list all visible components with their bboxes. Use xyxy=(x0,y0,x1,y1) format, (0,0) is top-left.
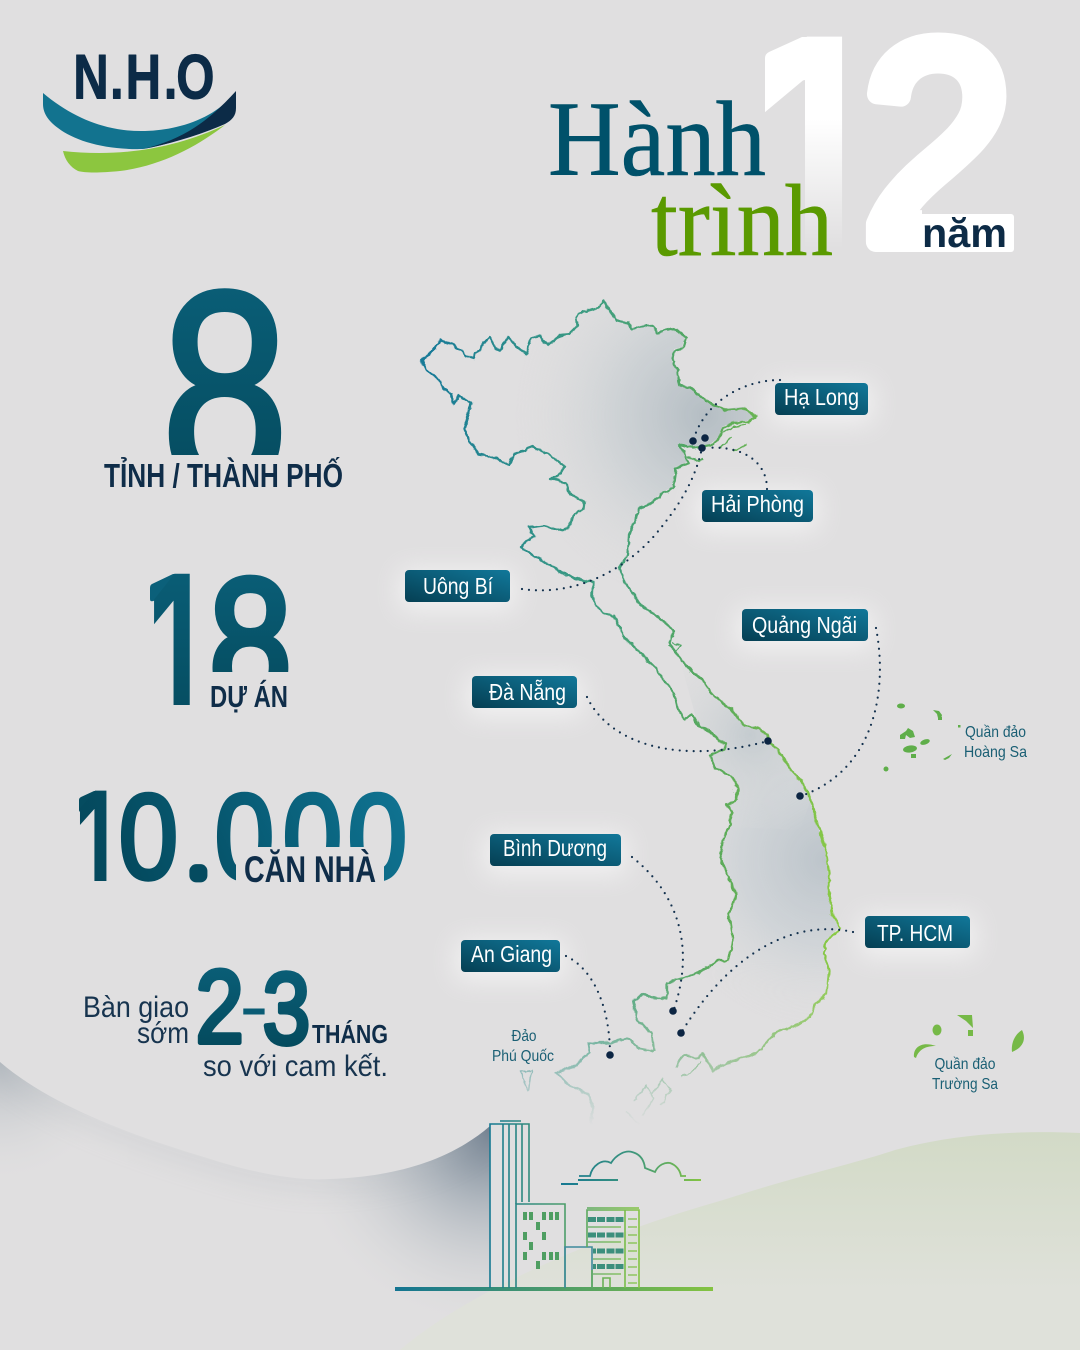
city skyline illustration xyxy=(395,1121,713,1291)
number 1 of 18 xyxy=(150,574,190,705)
islands: Hoang Sa xyxy=(884,704,960,772)
background wave: bottom left shadow xyxy=(0,1062,490,1278)
text THANG: THÁNG xyxy=(312,1019,388,1049)
label glows xyxy=(400,383,975,980)
number 2-3: - xyxy=(240,979,268,1035)
map outline xyxy=(421,301,839,1125)
islands label: Truong Sa: Trường Sa xyxy=(932,1076,998,1093)
stat: handover 2-3 months early xyxy=(83,949,388,1083)
label: Quang Ngai: Quảng Ngãi xyxy=(752,612,857,638)
islands label: Truong Sa: Quần đảo xyxy=(934,1056,996,1073)
word trinh: trình xyxy=(651,164,833,278)
digit 0: 0 xyxy=(119,771,178,905)
three clipped zeros: 0 xyxy=(283,771,342,905)
text som: sớm xyxy=(137,1017,189,1050)
three clipped zeros: 0 xyxy=(348,771,407,905)
caption: DỰ ÁN xyxy=(210,679,288,714)
caption: TỈNH / THÀNH PHỐ xyxy=(104,456,343,494)
tower xyxy=(490,1121,529,1288)
caption: CĂN NHÀ xyxy=(244,849,376,890)
background hill: bottom right green xyxy=(400,1132,1080,1350)
stat: 18 projects xyxy=(150,574,288,712)
label: Da Nang: Đà Nẵng xyxy=(489,678,566,705)
connector: An Giang xyxy=(566,956,610,1055)
text Ban giao: Bàn giao xyxy=(83,991,189,1024)
number 8 of 18: 8 xyxy=(209,541,292,739)
label: Ha Long: Hạ Long xyxy=(784,384,859,410)
connector: TP HCM xyxy=(681,929,853,1033)
digit 1 xyxy=(79,790,106,881)
islands: Truong Sa xyxy=(914,1015,1024,1058)
label: An Giang: An Giang xyxy=(471,941,552,967)
title: Hành trình 12 năm xyxy=(550,32,1014,256)
logo navy swoosh xyxy=(143,91,236,149)
islands label: Hoang Sa: Quần đảo xyxy=(965,724,1026,741)
numeral 1 fading out xyxy=(765,36,842,214)
map of Vietnam xyxy=(421,301,839,1125)
logo: N.H.O xyxy=(43,42,236,172)
number 2-3: 3 xyxy=(262,952,310,1065)
number 2-3: 2 xyxy=(196,949,244,1065)
three clipped zeros: 0 xyxy=(215,771,274,905)
stat: 10.000 homes xyxy=(79,790,405,882)
apartment block xyxy=(587,1208,639,1288)
decimal point: . xyxy=(194,849,203,882)
nam tag xyxy=(918,214,1014,252)
label: Da Nang xyxy=(472,676,577,708)
label: Uong Bi: Uông Bí xyxy=(423,573,494,599)
word nam: năm xyxy=(922,210,1007,256)
connector: Da Nang xyxy=(587,697,768,751)
connector: Uong Bi xyxy=(522,448,702,590)
ground line xyxy=(395,1287,713,1291)
office block xyxy=(516,1204,565,1288)
label: Uong Bi xyxy=(405,570,510,602)
connector: Hai Phong xyxy=(706,448,767,489)
logo wordmark: N.H.O xyxy=(73,42,214,112)
map shading xyxy=(574,322,838,974)
number 2-3 xyxy=(196,949,310,1065)
logo green swoosh xyxy=(63,125,225,172)
coastal fragments xyxy=(520,424,745,1125)
location dots xyxy=(606,434,804,1059)
connector: Ha Long xyxy=(693,380,780,441)
number 8: 8 xyxy=(161,234,289,547)
connector: Quang Ngai xyxy=(801,628,880,796)
island label: Phu Quoc: Phú Quốc xyxy=(492,1048,554,1065)
low block xyxy=(565,1247,592,1288)
three clipped zeros xyxy=(216,792,405,881)
label: Hai Phong: Hải Phòng xyxy=(711,491,804,517)
label: TP HCM: TP. HCM xyxy=(877,920,953,946)
digit 1: 1 xyxy=(74,757,123,931)
text so voi cam ket: so với cam kết. xyxy=(203,1050,388,1083)
label: An Giang xyxy=(461,940,560,972)
connector: Binh Duong xyxy=(632,857,683,1012)
stat: 8 provinces xyxy=(104,288,342,488)
logo teal swoosh xyxy=(43,93,230,149)
label: Binh Duong: Bình Dương xyxy=(503,835,607,861)
island label: Phu Quoc: Đảo xyxy=(512,1028,537,1045)
label: Binh Duong xyxy=(490,834,621,866)
islands label: Hoang Sa: Hoàng Sa xyxy=(964,744,1027,761)
cloud xyxy=(561,1152,701,1184)
number 1 of 18: 1 xyxy=(146,524,212,781)
word Hanh: Hành xyxy=(548,81,766,199)
